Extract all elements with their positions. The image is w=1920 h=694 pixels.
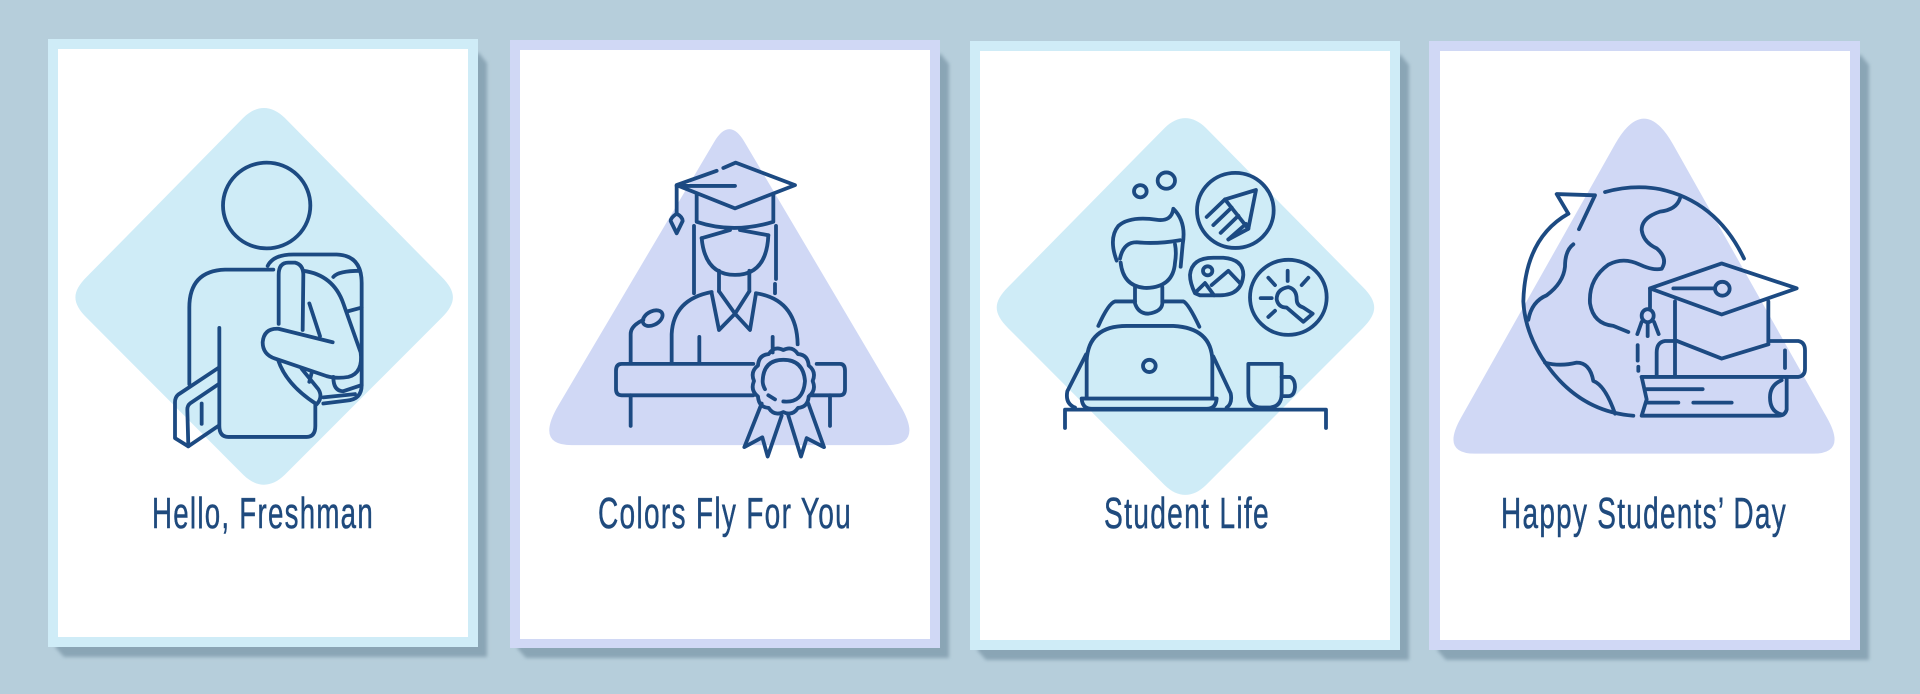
- card: Student Life: [970, 41, 1409, 660]
- card shadow: [977, 54, 1409, 660]
- card title: Colors Fly For You: [598, 489, 852, 538]
- card: Colors Fly For You: [510, 40, 949, 658]
- card title: Student Life: [1104, 489, 1270, 538]
- background triangle: [1453, 119, 1835, 454]
- card frame: [970, 41, 1400, 650]
- card frame: [1429, 41, 1860, 650]
- card white panel: [58, 49, 468, 637]
- icon: freshman with backpack: [175, 163, 362, 446]
- icon: graduate at lectern with rosette: [616, 163, 845, 457]
- background triangle: [549, 129, 909, 445]
- card white panel: [980, 51, 1390, 640]
- icon: student at laptop with thought bubbles: [1065, 172, 1327, 428]
- card title: Hello, Freshman: [152, 489, 374, 538]
- card white panel: [520, 50, 930, 639]
- background diamond: [75, 108, 453, 485]
- icon: globe with graduation cap and books: [1523, 187, 1805, 416]
- card shadow: [1437, 54, 1869, 660]
- card frame: [510, 40, 940, 648]
- card shadow: [517, 53, 949, 658]
- card white panel: [1440, 51, 1850, 640]
- background diamond: [997, 118, 1374, 495]
- card: Happy Students' Day: [1429, 41, 1869, 660]
- card shadow: [55, 52, 487, 657]
- card: Hello, Freshman: [48, 39, 487, 657]
- card frame: [48, 39, 478, 647]
